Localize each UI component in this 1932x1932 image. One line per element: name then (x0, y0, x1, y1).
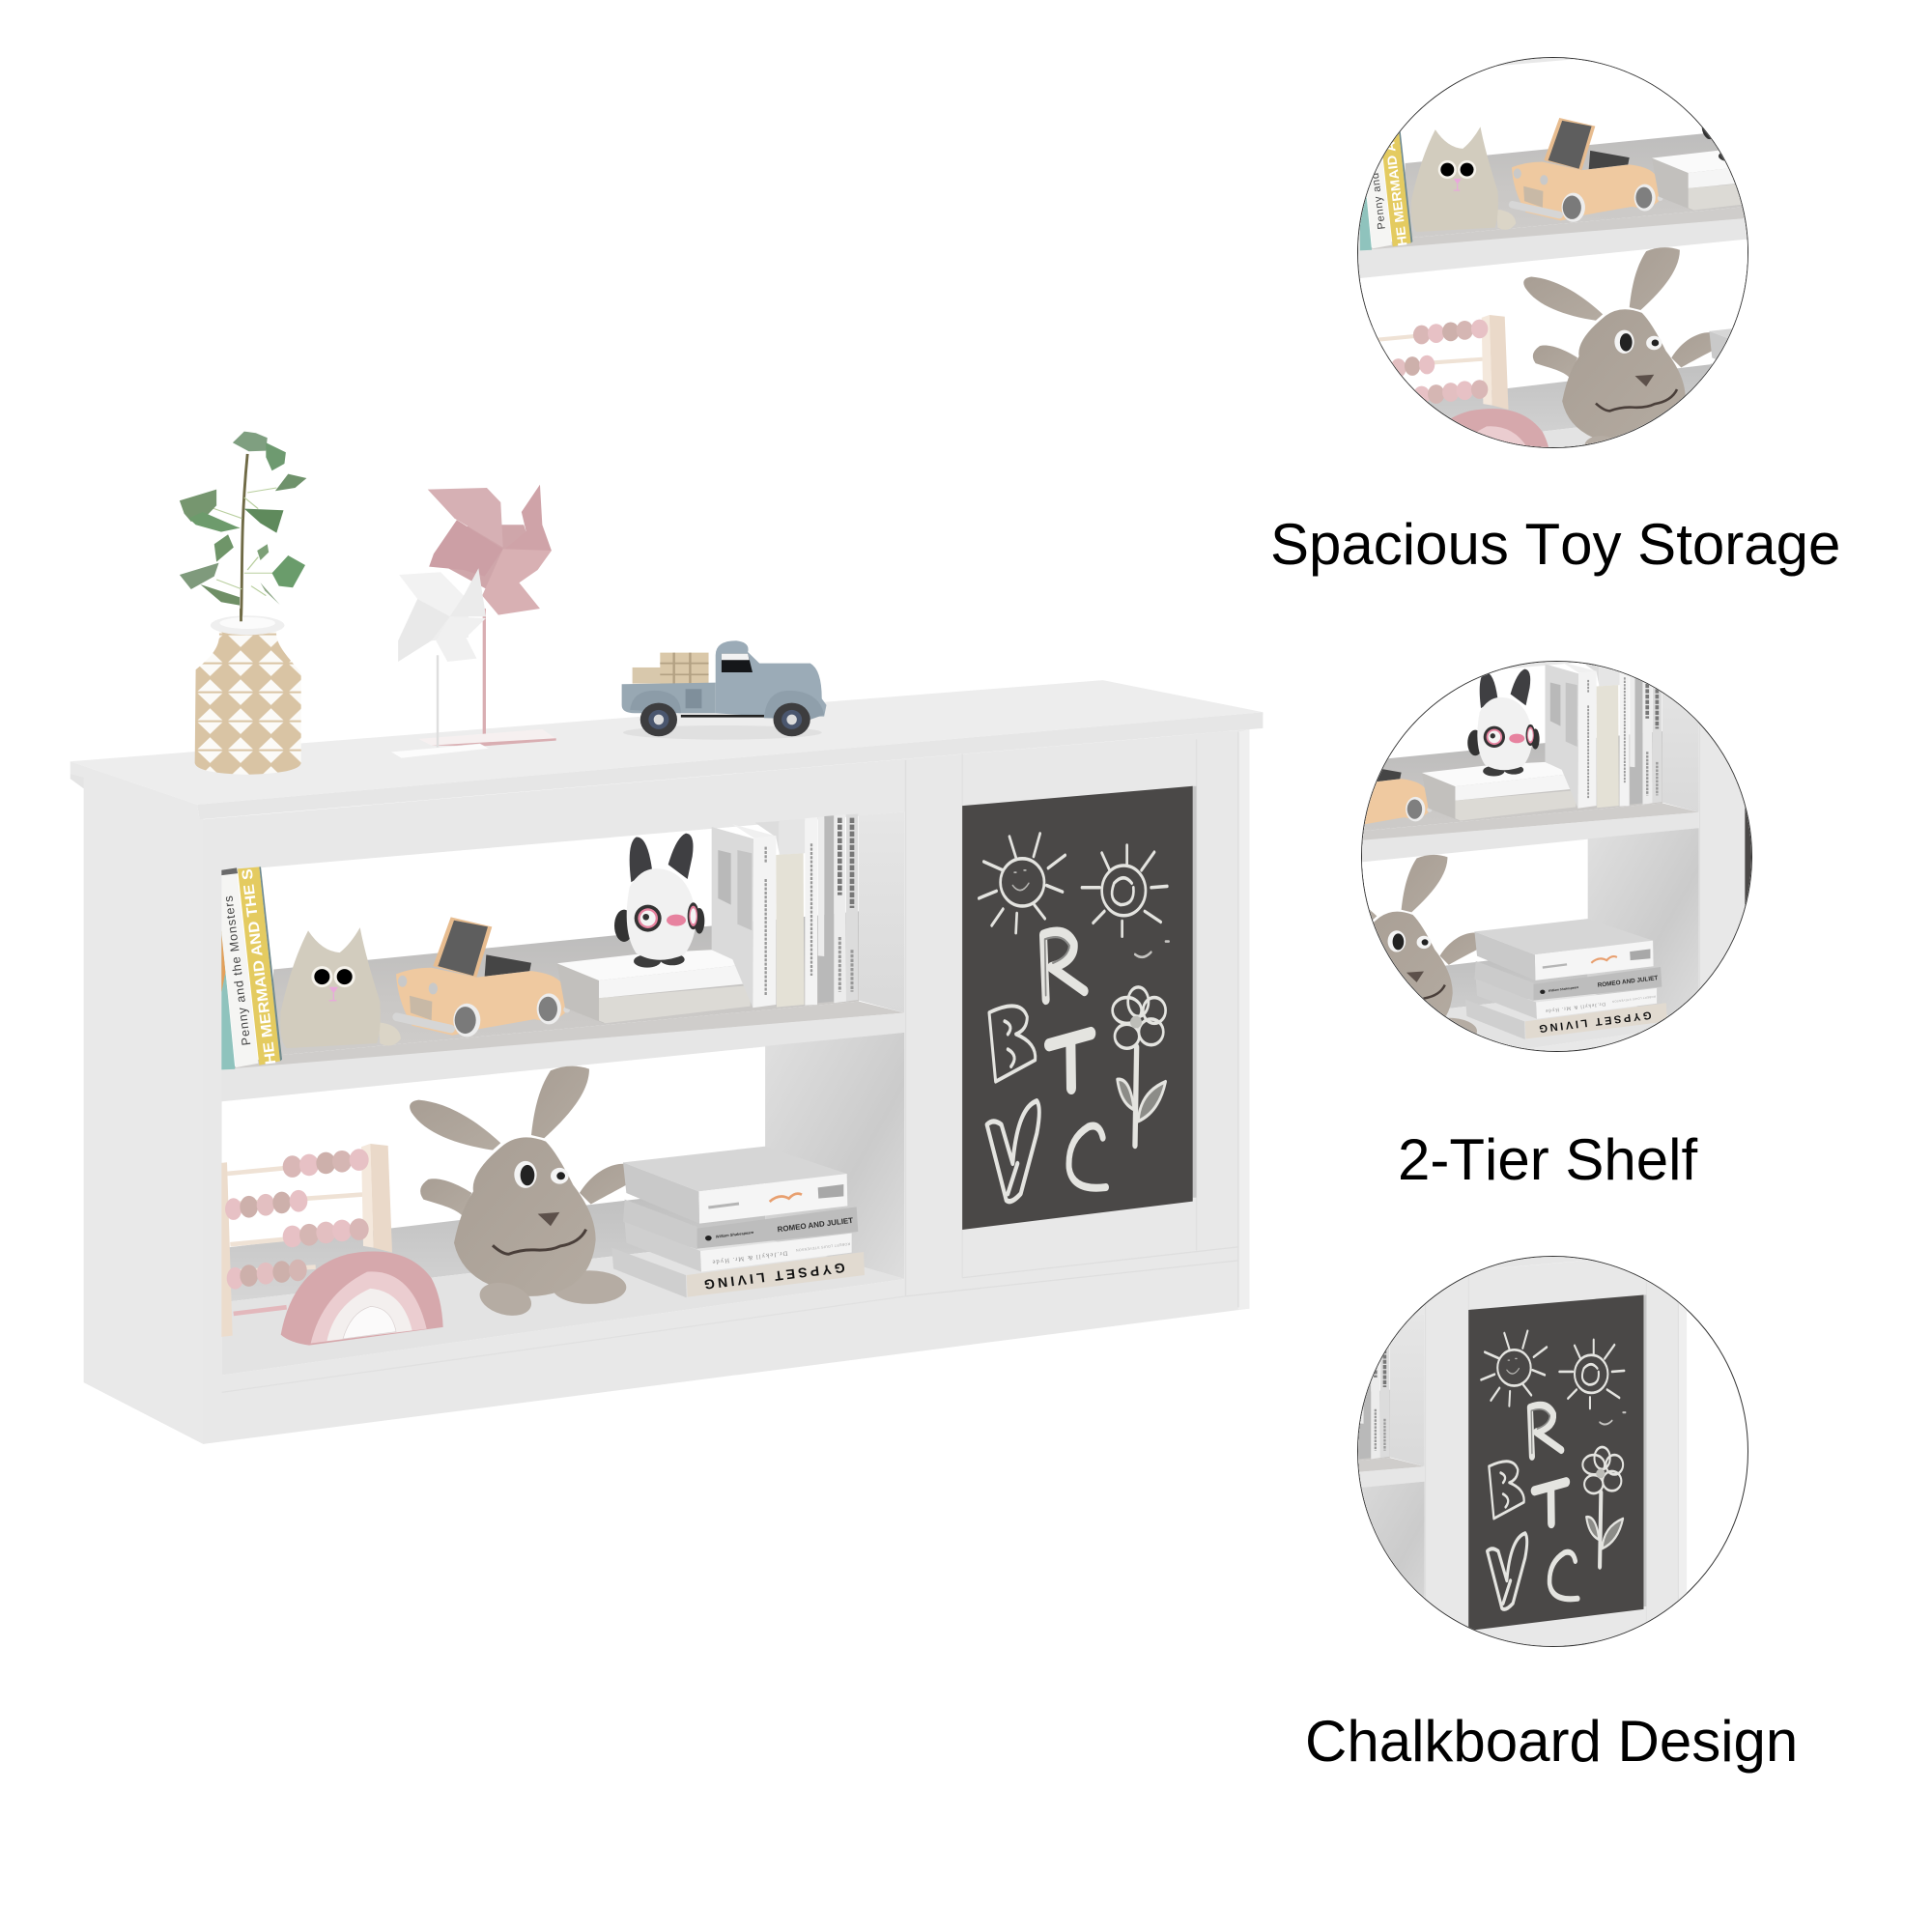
chalk letter B (989, 1006, 1036, 1082)
panda robot toy (614, 834, 704, 968)
plush bunny (410, 1066, 633, 1321)
toy truck (622, 640, 827, 740)
pink pinwheel (418, 485, 556, 746)
detail circle: toy storage (1357, 57, 1748, 448)
book: Gypset Living (611, 1248, 865, 1297)
chalk letter C (1069, 1126, 1106, 1188)
book: Romeo and Juliet: William Shakespeare (716, 1230, 754, 1239)
stacking rainbow (281, 1251, 443, 1346)
detail circle: 2-tier shelf (1361, 661, 1752, 1052)
stacked books lower (611, 1147, 865, 1297)
upper shelf opening (222, 812, 904, 1070)
storybooks (221, 867, 282, 1069)
toy car (396, 917, 570, 1037)
chalk sun with face (979, 834, 1065, 933)
patterned vase (195, 609, 301, 775)
detail circle: chalkboard (1357, 1256, 1748, 1647)
book: Romeo and Juliet: ROMEO AND JULIET (777, 1216, 854, 1234)
spine: The Mermaid and the Sea: HE MERMAID AND THE S (240, 867, 279, 1065)
chalk letter R (1043, 932, 1085, 1000)
chalk flower (1113, 987, 1166, 1146)
cabinet body (84, 729, 1249, 1444)
abacus (221, 1144, 392, 1337)
book: Dr. Jekyll and Mr. Hyde: ROBERT LOUIS STEVENSON (795, 1241, 850, 1252)
top decorations (180, 432, 827, 775)
caption: 2-Tier Shelf: 2-Tier Shelf (1398, 1127, 1697, 1192)
book: top (623, 1147, 847, 1224)
flat white books (557, 950, 751, 1023)
white pinwheel (390, 568, 489, 758)
chalk letter T (1049, 1034, 1091, 1088)
chalk letter V (987, 1101, 1039, 1202)
upper shelf left items (221, 867, 570, 1069)
chalkboard (962, 786, 1197, 1230)
caption: Spacious Toy Storage: Spacious Toy Storage (1270, 512, 1840, 576)
upright books (712, 814, 858, 1008)
spine: Penny and the Monsters: Penny and the Monsters (221, 895, 253, 1046)
lower shelf opening (222, 1033, 904, 1375)
book: Dr. Jekyll and Mr. Hyde (625, 1222, 852, 1272)
book: Romeo and Juliet (623, 1200, 858, 1249)
toy cat (280, 927, 401, 1048)
lower shelf left items (221, 1066, 633, 1346)
chalk sun with spiral (1082, 845, 1167, 936)
book: Gypset Living: GYPSET LIVING (703, 1260, 846, 1293)
book: Dr. Jekyll and Mr. Hyde: Dr.Jekyll & Mr. Hyde (712, 1249, 788, 1265)
plant (180, 432, 306, 621)
caption: Chalkboard Design: Chalkboard Design (1305, 1709, 1798, 1774)
upper shelf right items (557, 814, 858, 1023)
middle shelf front edge (222, 1012, 904, 1101)
cabinet top (71, 680, 1263, 819)
